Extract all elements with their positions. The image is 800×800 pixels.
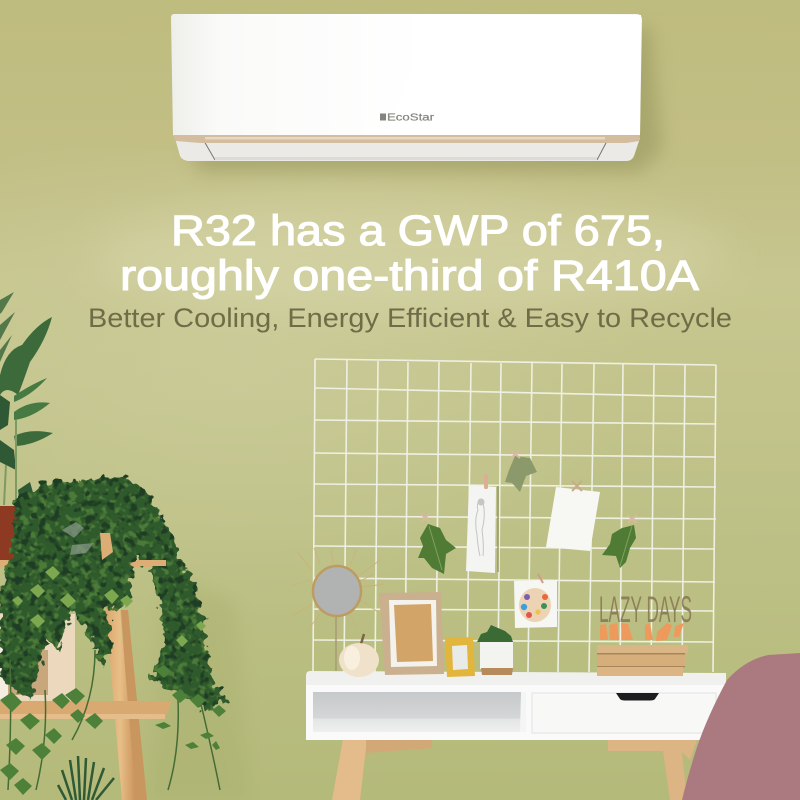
top shelf xyxy=(0,560,166,567)
open shelf xyxy=(313,692,526,732)
text: LAZY DAYS xyxy=(599,589,692,630)
headline line 2: roughly one-third of R410A xyxy=(120,253,700,300)
desk xyxy=(306,671,726,800)
zz plant xyxy=(0,292,53,505)
hanging leaf: right xyxy=(602,515,637,568)
sketch card xyxy=(466,474,498,573)
headline glow xyxy=(90,195,730,315)
figure sketch xyxy=(476,499,484,556)
desk front xyxy=(306,685,724,740)
ivy grey highlights xyxy=(62,522,94,555)
gold clip xyxy=(572,481,582,491)
large photo frame xyxy=(379,592,444,675)
unit body xyxy=(171,14,642,136)
blank note card xyxy=(546,481,600,551)
headline line 1: R32 has a GWP of 675, xyxy=(171,208,665,255)
gold trim xyxy=(173,135,640,143)
desk top xyxy=(306,671,726,686)
plant shelf unit xyxy=(0,506,172,800)
yellow photo frame xyxy=(445,637,475,677)
mirror stand xyxy=(310,615,342,672)
pink clip xyxy=(484,474,488,489)
lower shelf xyxy=(0,701,172,719)
red pot xyxy=(0,506,17,560)
flap seams xyxy=(204,141,607,160)
headline xyxy=(90,195,730,315)
right leg xyxy=(608,739,697,800)
mirror with sunburst xyxy=(290,548,385,672)
mirror glass xyxy=(313,566,361,616)
drawer handle xyxy=(616,693,659,700)
orange sign pieces xyxy=(600,623,684,641)
visible leg top xyxy=(100,533,113,560)
potted plant xyxy=(477,625,513,675)
ivy lower leaves xyxy=(0,665,226,795)
ivy bright leaves xyxy=(12,566,206,647)
brand logo xyxy=(380,112,435,124)
hanging leaf: top dried xyxy=(505,450,537,492)
hanging leaf: left xyxy=(418,513,456,574)
sun rays xyxy=(290,548,385,630)
visible shelf edge xyxy=(136,560,166,566)
brand logo: EcoStar xyxy=(387,112,435,124)
back leg xyxy=(121,610,147,800)
wire grid board xyxy=(313,359,716,672)
small floor plant xyxy=(58,756,114,800)
air conditioner shadow xyxy=(190,25,662,172)
lower flap xyxy=(175,138,640,161)
pumpkin xyxy=(339,634,379,677)
wooden book stand xyxy=(597,645,688,676)
ivy foliage mass xyxy=(0,477,226,712)
picture on shelf xyxy=(0,614,75,710)
ivy trailing stems xyxy=(8,650,220,790)
subheading: Better Cooling, Energy Efficient & Easy to Recycle xyxy=(88,303,732,333)
palette card xyxy=(514,574,557,628)
desk objects xyxy=(339,589,692,677)
drawer xyxy=(532,693,716,733)
ivy plant xyxy=(0,477,226,800)
air conditioner xyxy=(171,14,662,172)
chair xyxy=(682,653,800,800)
left leg xyxy=(332,739,367,800)
front leg xyxy=(104,560,136,800)
left stretcher xyxy=(366,739,432,753)
